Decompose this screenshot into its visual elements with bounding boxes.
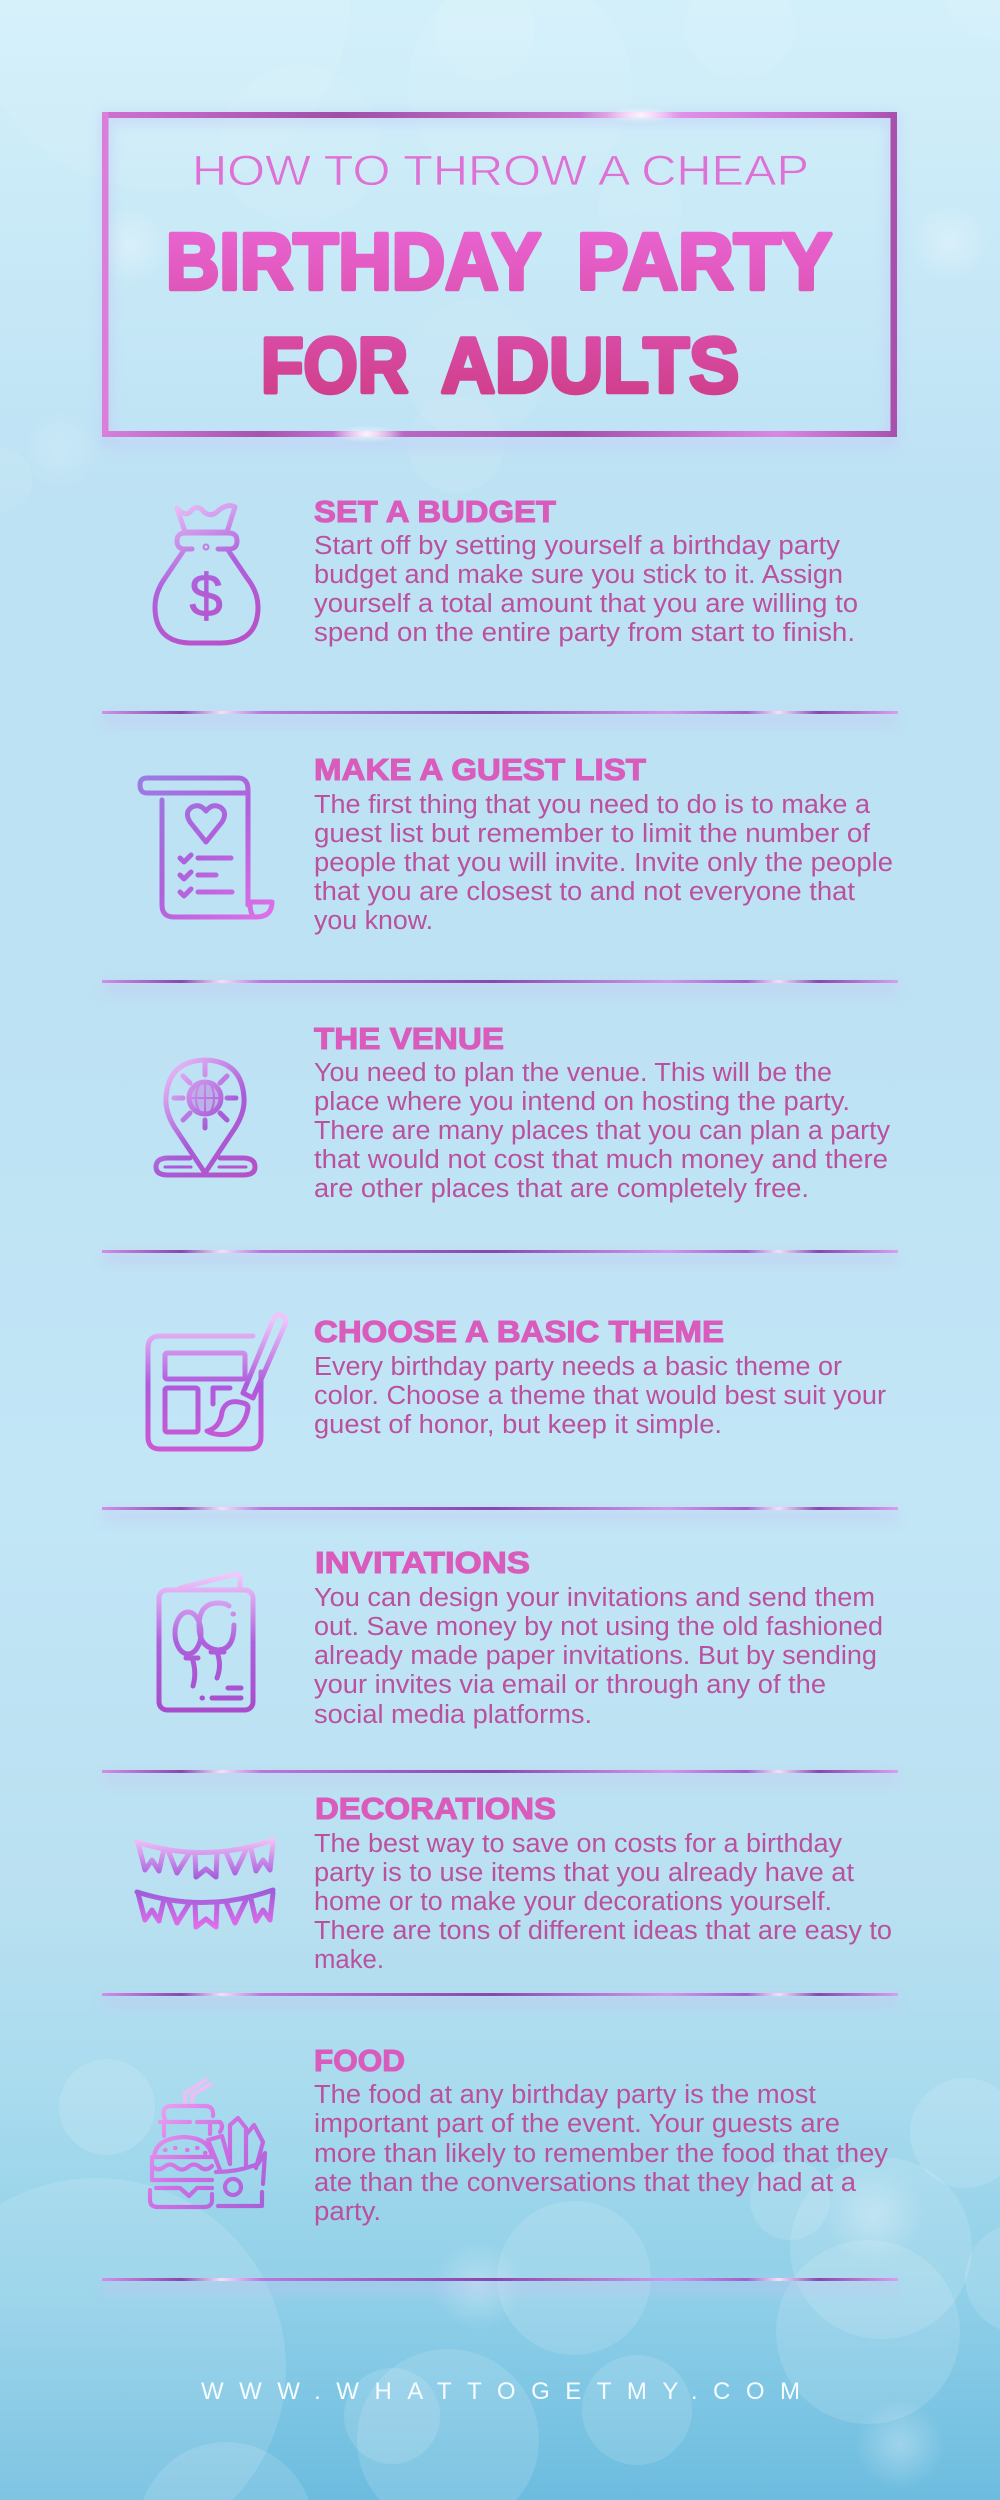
heading: INVITATIONS	[315, 1545, 530, 1580]
icon: location pin with globe	[156, 1060, 255, 1175]
footer website: WWW.WHATTOGETMY.COM	[201, 2378, 800, 2405]
heading: FOOD	[314, 2043, 405, 2078]
body text	[314, 2081, 888, 2226]
body text: home or to make your decorations yourself.	[314, 1888, 832, 1916]
body text: you know.	[314, 907, 433, 935]
body text: There are tons of different ideas that are easy to	[314, 1917, 892, 1945]
body text: guest of honor, but keep it simple.	[314, 1411, 722, 1439]
divider	[102, 2278, 898, 2293]
heading: THE VENUE	[314, 1021, 504, 1056]
body text: place where you intend on hosting the party.	[314, 1088, 850, 1116]
body text: party.	[314, 2198, 381, 2226]
body text: The best way to save on costs for a birthday	[314, 1830, 842, 1858]
section: the venue	[156, 1021, 890, 1203]
body text	[314, 791, 893, 935]
section: set a budget	[155, 494, 858, 647]
heading: SET A BUDGET	[314, 494, 556, 529]
body text	[314, 1830, 892, 1974]
section: make a guest list	[140, 752, 893, 935]
section: choose a basic theme	[148, 1314, 887, 1449]
body text: spend on the entire party from start to finish.	[314, 619, 855, 647]
divider	[102, 1993, 898, 2008]
title frame	[102, 106, 897, 443]
body text: ate than the conversations that they had at a	[314, 2169, 857, 2197]
divider	[102, 980, 898, 995]
body text: important part of the event. Your guests are	[314, 2110, 840, 2138]
body text: Start off by setting yourself a birthday party	[314, 532, 840, 560]
body text	[314, 1584, 883, 1729]
title line: how to throw a cheap: HOW TO THROW A CHEAP	[192, 147, 809, 195]
body text	[314, 1059, 890, 1203]
icon: balloon card	[159, 1574, 253, 1710]
body text: social media platforms.	[314, 1701, 592, 1729]
title line: for adults: FOR	[261, 321, 408, 409]
heading: DECORATIONS	[315, 1791, 556, 1826]
divider	[102, 711, 898, 726]
icon: layout and paint brush	[148, 1315, 286, 1449]
body text: already made paper invitations. But by sending	[314, 1642, 877, 1670]
title line: for adults: ADULTS	[441, 321, 739, 409]
body text: There are many places that you can plan a party	[314, 1117, 890, 1145]
title line: birthday party: PARTY	[577, 217, 832, 306]
section: food	[150, 2043, 888, 2226]
icon: bunting garlands	[137, 1840, 273, 1927]
icon: money bag	[155, 506, 258, 643]
body text: party is to use items that you already have at	[314, 1859, 854, 1887]
body text: are other places that are completely free.	[314, 1175, 809, 1203]
section: invitations	[159, 1545, 883, 1729]
body text: color. Choose a theme that would best suit your	[314, 1382, 887, 1410]
title line: birthday party: BIRTHDAY	[166, 217, 541, 306]
icon: guest list scroll	[140, 778, 272, 917]
body text: more than likely to remember the food that they	[314, 2140, 888, 2168]
body text: The food at any birthday party is the most	[314, 2081, 816, 2109]
body text: make.	[314, 1946, 384, 1974]
body text: budget and make sure you stick to it. Assign	[314, 561, 843, 589]
divider	[102, 1250, 898, 1265]
body text: that you are closest to and not everyone that	[314, 878, 855, 906]
icon: burger, drink and fries	[150, 2080, 265, 2207]
body text: guest list but remember to limit the number of	[314, 820, 871, 848]
body text: people that you will invite. Invite only the people	[314, 849, 893, 877]
body text	[314, 1353, 887, 1439]
body text: out. Save money by not using the old fashioned	[314, 1613, 883, 1641]
body text: You can design your invitations and send them	[314, 1584, 875, 1612]
heading: MAKE A GUEST LIST	[314, 752, 646, 787]
section: decorations	[137, 1791, 892, 1974]
body text: The first thing that you need to do is to make a	[314, 791, 871, 819]
divider	[102, 1770, 898, 1785]
body text: yourself a total amount that you are willing to	[314, 590, 858, 618]
body text: that would not cost that much money and there	[314, 1146, 888, 1174]
body text: your invites via email or through any of the	[314, 1671, 826, 1699]
divider	[102, 1507, 898, 1522]
icon: money bag: $	[189, 562, 223, 629]
body text: You need to plan the venue. This will be the	[314, 1059, 832, 1087]
body text: Every birthday party needs a basic theme or	[314, 1353, 843, 1381]
heading: CHOOSE A BASIC THEME	[314, 1314, 724, 1349]
title	[166, 147, 832, 409]
body text	[314, 532, 858, 647]
